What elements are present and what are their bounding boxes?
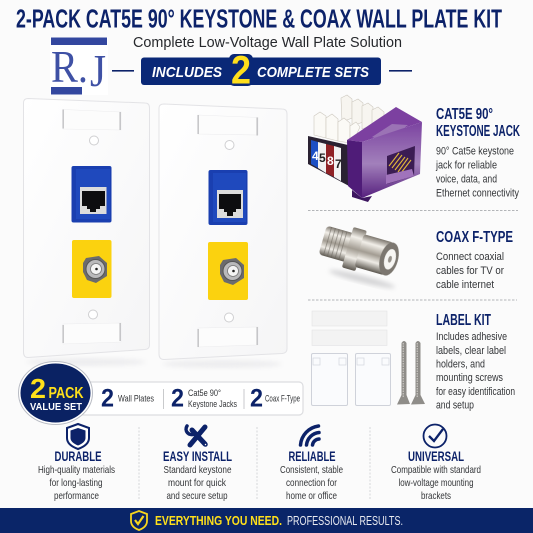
back white punch-down towers bbox=[341, 95, 384, 132]
badge: 2 pack value set: VALUE SET bbox=[30, 402, 82, 413]
text: coax description: cables for TV or bbox=[436, 265, 504, 277]
contents strip: Wall Plates bbox=[118, 394, 154, 404]
icon: yellow shield check bbox=[131, 511, 147, 530]
wall plate 1 bbox=[24, 98, 150, 366]
badge: 2 pack value set: 2 bbox=[30, 373, 46, 404]
feature: universal: brackets bbox=[421, 490, 451, 502]
contents strip: Cat5e 90° bbox=[188, 388, 221, 398]
text: keystone description bbox=[435, 146, 519, 200]
clear label holders bbox=[312, 354, 390, 406]
feature: durable: for long-lasting bbox=[50, 477, 103, 489]
text: label kit description: and setup bbox=[436, 400, 474, 412]
banner: includes 2 complete sets: COMPLETE SETS bbox=[257, 64, 369, 81]
feature: durable: DURABLE bbox=[54, 449, 102, 464]
text: keystone description: jack for reliable bbox=[435, 160, 497, 172]
blue keystone jack 1 bbox=[72, 166, 112, 222]
feature: reliable: RELIABLE bbox=[288, 449, 336, 464]
subtitle: Complete Low-Voltage Wall Plate Solution bbox=[133, 35, 402, 51]
feature: reliable: Consistent, stable bbox=[280, 464, 343, 476]
badge: 2 pack value set: PACK bbox=[48, 385, 84, 402]
contents strip: 2 bbox=[171, 384, 184, 412]
feature: easy install: and secure setup bbox=[166, 490, 228, 502]
feature: universal: UNIVERSAL bbox=[408, 449, 464, 464]
feature: durable bbox=[38, 424, 115, 502]
heading: cat5e: CAT5E 90° bbox=[436, 106, 493, 123]
feature: reliable: home or office bbox=[286, 490, 337, 502]
contents strip: 2 bbox=[250, 384, 263, 412]
feature: universal bbox=[391, 424, 481, 502]
text: keystone description: voice, data, and bbox=[436, 174, 497, 186]
text: coax description: cable internet bbox=[436, 279, 494, 291]
front white punch-down towers bbox=[314, 112, 360, 144]
footer banner: PROFESSIONAL RESULTS. bbox=[287, 514, 403, 528]
text: label kit description: mounting screws bbox=[436, 372, 503, 384]
feature: reliable: connection for bbox=[286, 477, 337, 489]
color code strip 4 5 8 7: 7 bbox=[335, 157, 342, 171]
purple housing bbox=[347, 107, 422, 142]
blue keystone jack 2 bbox=[208, 170, 248, 225]
icon: wrench and screwdriver bbox=[186, 426, 207, 446]
footer banner bbox=[0, 508, 533, 533]
contents strip: 2 bbox=[101, 384, 114, 412]
text: label kit description bbox=[436, 331, 515, 412]
icon: signal waves bbox=[300, 426, 319, 445]
contents strip bbox=[80, 382, 303, 415]
gold contacts bbox=[389, 153, 411, 173]
text: label kit description: Includes adhesive bbox=[436, 331, 507, 343]
feature: universal: Compatible with standard bbox=[391, 464, 481, 476]
color code strip 4 5 8 7: 4 bbox=[312, 149, 319, 163]
banner: includes 2 complete sets: 2 bbox=[231, 48, 251, 92]
color code strip 4 5 8 7: 8 bbox=[327, 154, 334, 168]
text: coax description: Connect coaxial bbox=[436, 251, 504, 263]
feature: easy install: mount for quick bbox=[168, 477, 227, 489]
icon: shield bbox=[67, 424, 89, 449]
contents strip: Coax F-Type bbox=[265, 394, 300, 404]
feature: reliable bbox=[280, 426, 343, 502]
feature: durable: performance bbox=[54, 490, 99, 502]
banner: includes 2 complete sets: INCLUDES bbox=[152, 64, 222, 81]
feature: universal: low-voltage mounting bbox=[398, 477, 474, 489]
yellow coax insert 1 bbox=[72, 240, 112, 298]
wall plate 2 bbox=[159, 104, 287, 368]
product: keystone jack image bbox=[308, 95, 422, 202]
footer banner: EVERYTHING YOU NEED. bbox=[155, 514, 282, 528]
badge: 2 pack value set bbox=[18, 362, 92, 424]
logo: R.J: R. bbox=[51, 41, 88, 92]
mounting screws bbox=[397, 341, 425, 404]
feature: easy install bbox=[163, 426, 232, 502]
color code strip 4 5 8 7: 5 bbox=[319, 151, 326, 165]
contents strip: Keystone Jacks bbox=[188, 399, 237, 409]
logo: R.J: J bbox=[90, 45, 106, 96]
color code strip 4 5 8 7 bbox=[308, 136, 349, 186]
feature: easy install: EASY INSTALL bbox=[163, 449, 232, 464]
jack opening bbox=[387, 146, 415, 184]
product: label kit image bbox=[312, 311, 425, 406]
product: coax f-type image bbox=[317, 220, 403, 291]
text: keystone description: 90° Cat5e keystone bbox=[436, 146, 514, 158]
text: coax description bbox=[436, 251, 504, 291]
heading: label kit: LABEL KIT bbox=[436, 312, 491, 329]
feature: easy install: Standard keystone bbox=[164, 464, 232, 476]
text: label kit description: holders, and bbox=[436, 358, 485, 370]
adhesive labels bbox=[312, 311, 387, 346]
banner: includes 2 complete sets bbox=[112, 48, 412, 92]
icon: check circle bbox=[424, 424, 446, 448]
yellow coax insert 2 bbox=[208, 242, 248, 300]
logo: R.J bbox=[50, 37, 108, 96]
feature: durable: High-quality materials bbox=[38, 464, 115, 476]
text: label kit description: labels, clear label bbox=[436, 345, 506, 357]
